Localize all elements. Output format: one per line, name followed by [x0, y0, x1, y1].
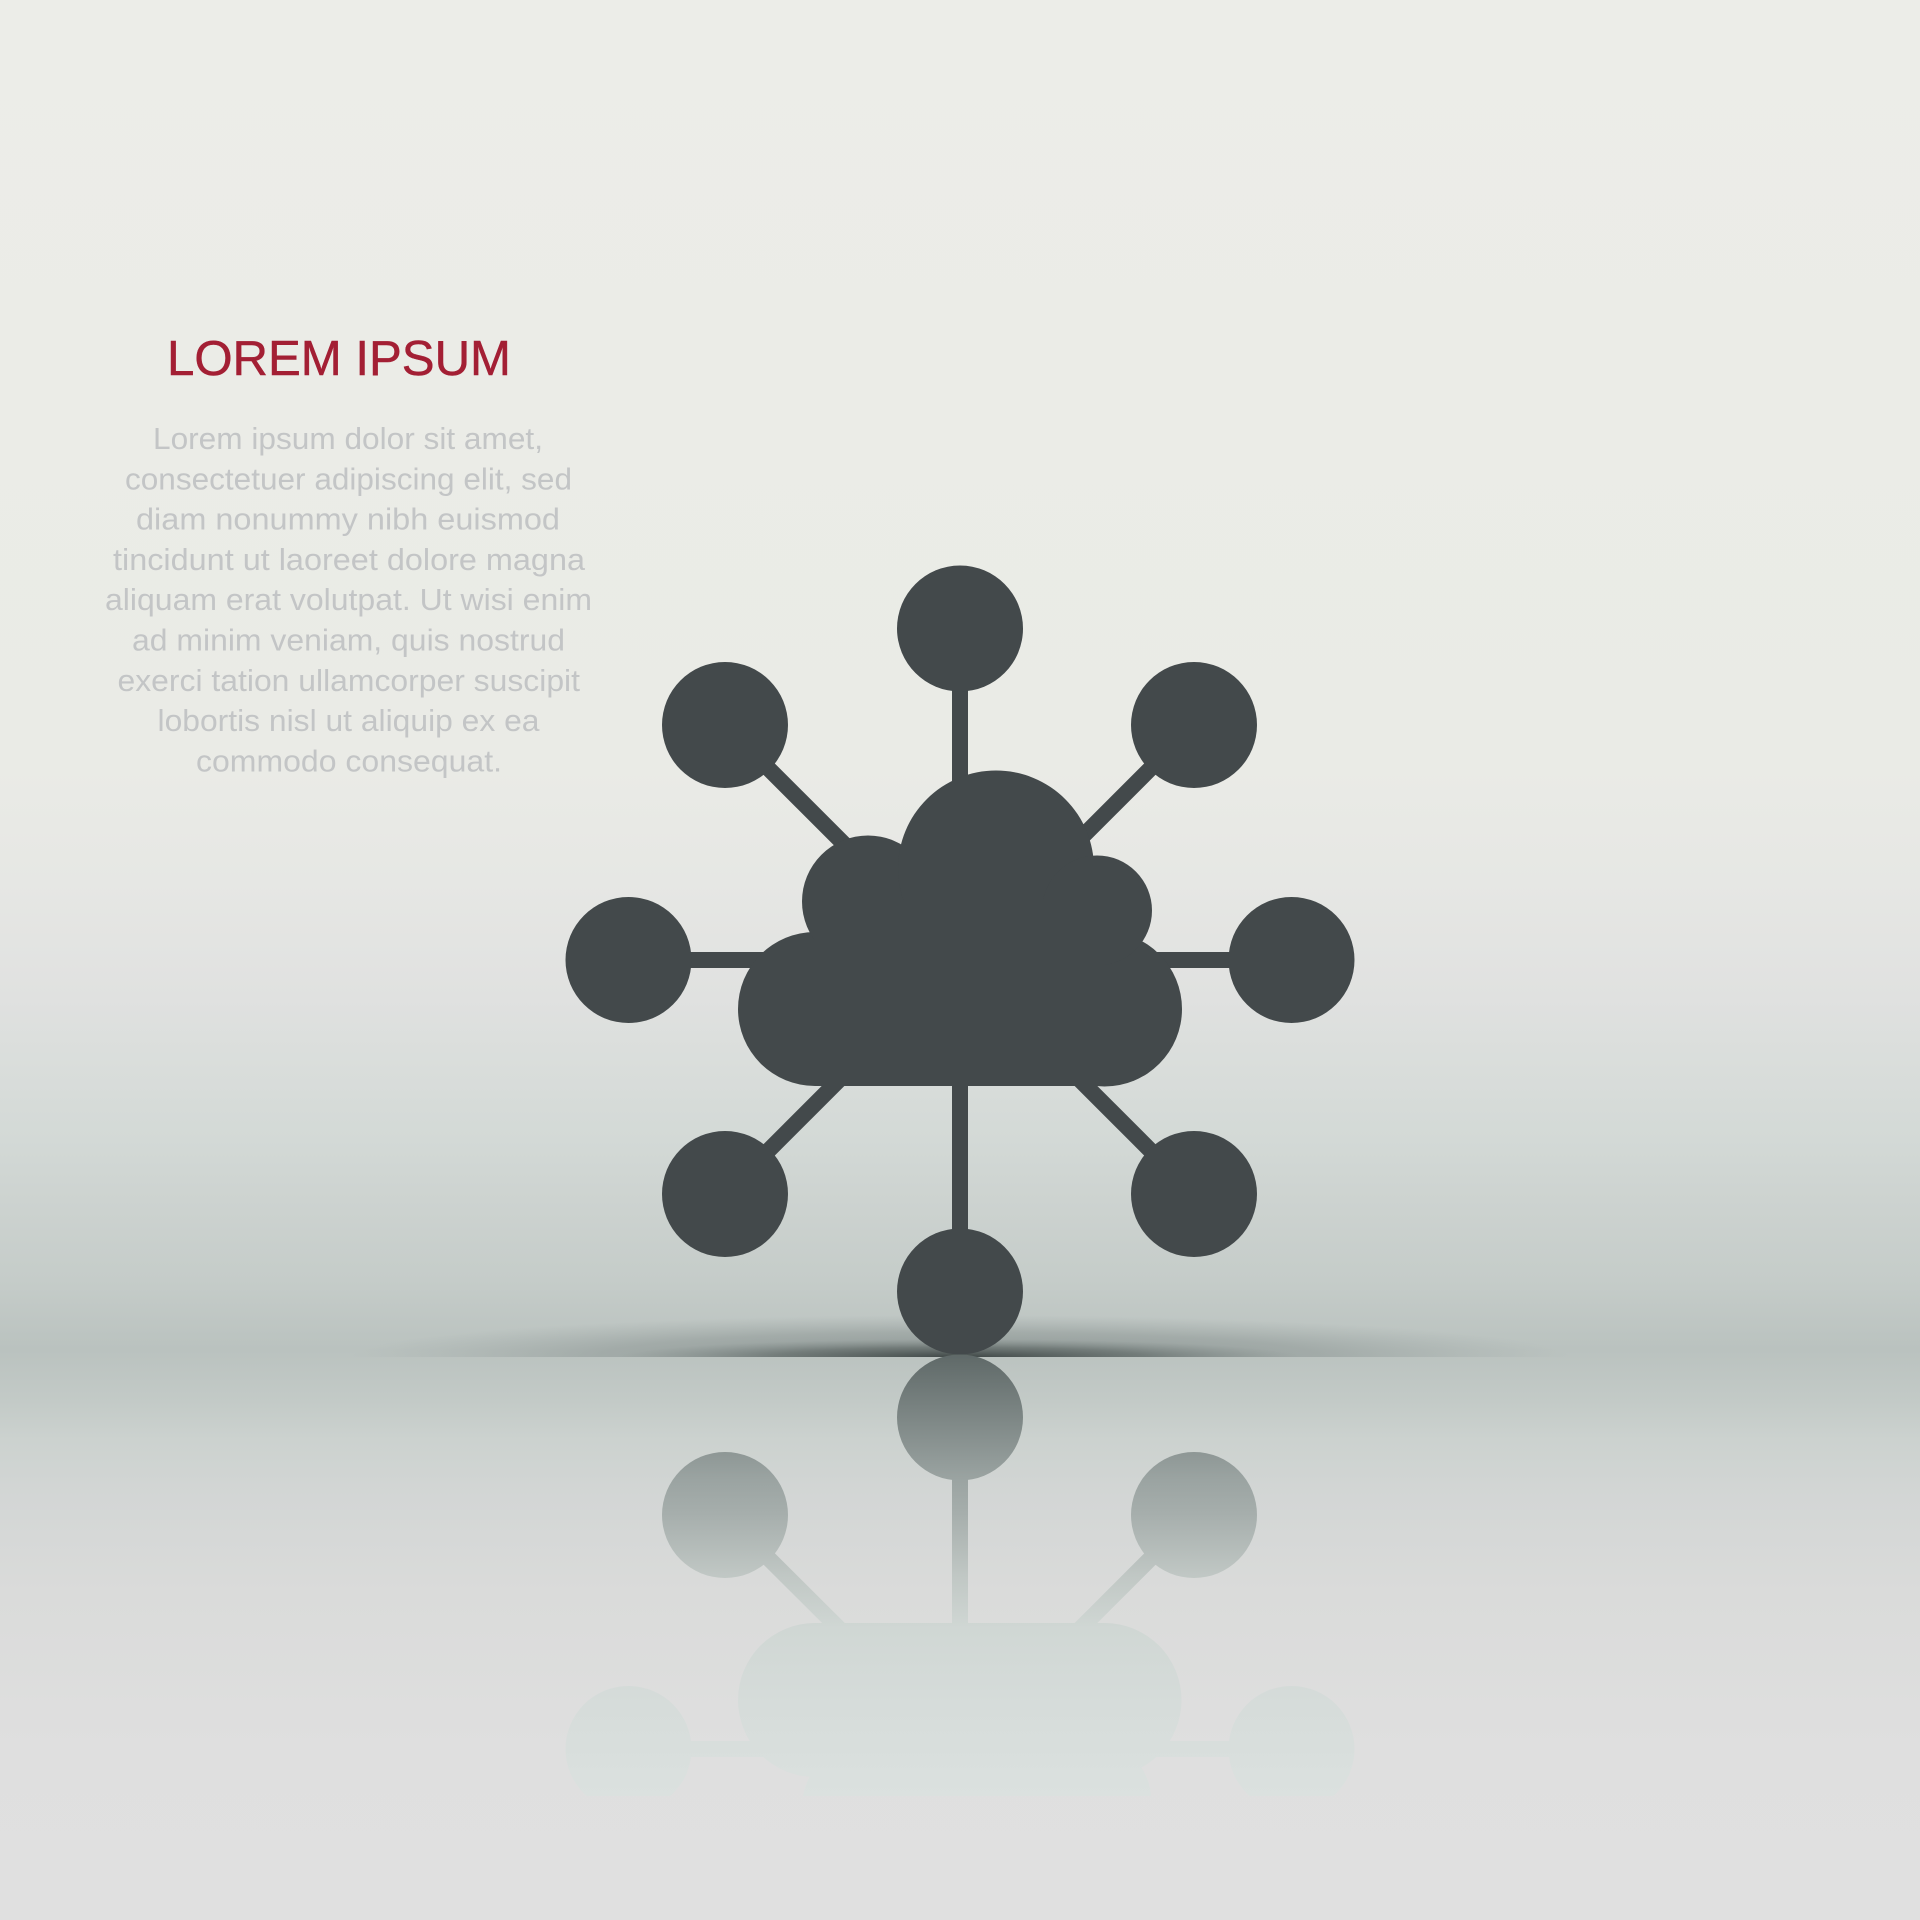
- ground shadow: [447, 1322, 1474, 1357]
- reflection of network icon: [590, 1354, 1328, 1700]
- connector lines: [628, 628, 1292, 1291]
- outer nodes: [566, 566, 1354, 1354]
- icon: cloud network: [566, 566, 1354, 1354]
- text block: lorem ipsum paragraph: tincidunt ut laoreet dolore magna: [113, 542, 586, 577]
- text block: lorem ipsum paragraph: exerci tation ullamcorper suscipit: [118, 663, 580, 698]
- text block: lorem ipsum paragraph: ad minim veniam, quis nostrud: [132, 622, 565, 658]
- text block: lorem ipsum paragraph: consectetuer adipiscing elit, sed: [125, 461, 572, 496]
- text block: lorem ipsum paragraph: diam nonummy nibh euismod: [136, 502, 560, 537]
- cloud: [738, 770, 1182, 1086]
- text block: lorem ipsum paragraph: [105, 421, 592, 778]
- text block: lorem ipsum paragraph: commodo consequat.: [196, 743, 502, 778]
- text block: lorem ipsum paragraph: lobortis nisl ut aliquip ex ea: [158, 703, 540, 738]
- text block: lorem ipsum paragraph: Lorem ipsum dolor sit amet,: [153, 421, 543, 456]
- heading: LOREM IPSUM: [167, 332, 511, 386]
- text block: lorem ipsum paragraph: aliquam erat volutpat. Ut wisi enim: [105, 582, 592, 617]
